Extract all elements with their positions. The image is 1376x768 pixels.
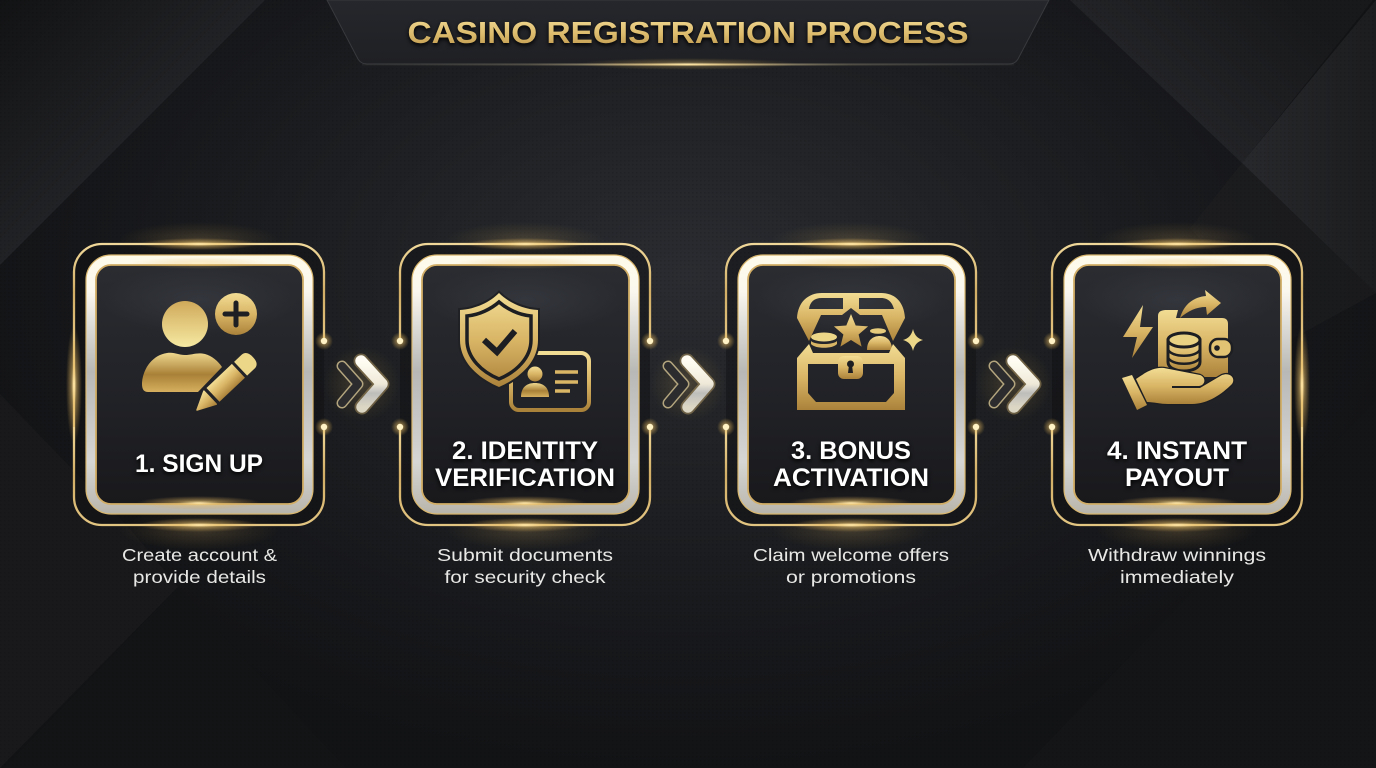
step description: Withdraw winnings — [1088, 545, 1266, 565]
step description: or promotions — [786, 567, 916, 587]
step description: provide details — [133, 567, 266, 587]
step title: ACTIVATION — [773, 464, 929, 492]
step title — [435, 437, 615, 492]
title: CASINO REGISTRATION PROCESS — [408, 15, 968, 50]
step title: 1. SIGN UP — [135, 450, 263, 478]
header banner — [327, 0, 1049, 70]
step description — [122, 545, 277, 587]
panel: step 3 bonus activation — [717, 222, 985, 587]
arrow: step 3 to 4 — [976, 346, 1052, 422]
icon: shield and id card — [460, 293, 589, 410]
panel: step 2 identity verification — [391, 222, 659, 587]
step title — [773, 437, 929, 492]
step title — [1107, 437, 1247, 492]
step title: 2. IDENTITY — [452, 437, 598, 465]
step description: for security check — [444, 567, 606, 587]
step description — [437, 545, 613, 587]
step description: Submit documents — [437, 545, 613, 565]
step description — [753, 545, 949, 587]
step description: immediately — [1120, 567, 1234, 587]
step title: 4. INSTANT — [1107, 437, 1247, 465]
arrow: step 1 to 2 — [324, 346, 400, 422]
step description: Create account & — [122, 545, 277, 565]
step title: PAYOUT — [1125, 464, 1229, 492]
step description — [1088, 545, 1266, 587]
panel: step 4 instant payout — [1043, 222, 1310, 587]
step title: 3. BONUS — [791, 437, 911, 465]
icon: user with plus and pencil — [142, 293, 259, 417]
icon: treasure chest — [797, 293, 923, 410]
step description: Claim welcome offers — [753, 545, 949, 565]
arrow: step 2 to 3 — [650, 346, 726, 422]
panel: step 1 sign up — [66, 222, 333, 587]
icon: wallet, coins, hand, bolt — [1122, 290, 1233, 410]
step title: VERIFICATION — [435, 464, 615, 492]
